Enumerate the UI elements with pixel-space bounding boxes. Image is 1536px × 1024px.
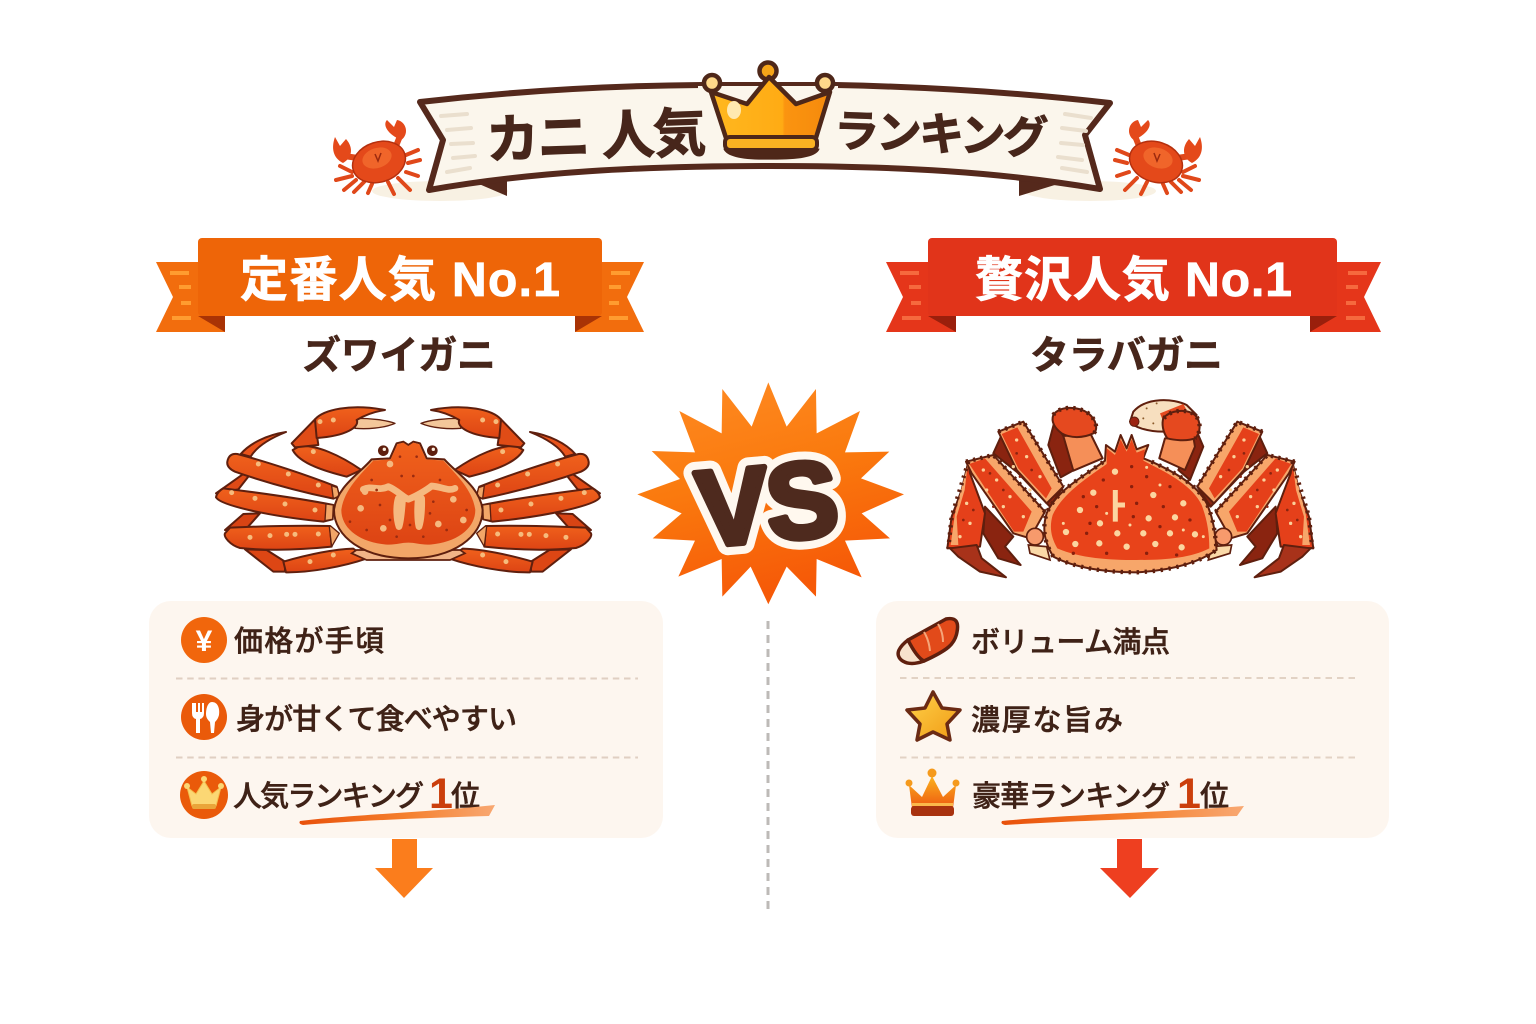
text: umami: 濃厚な旨み: [971, 704, 1123, 737]
panel dividers: [900, 678, 1360, 758]
icon: crown: [698, 62, 838, 159]
ribbon folds: [198, 316, 602, 332]
ribbon main band: [928, 238, 1337, 316]
icon: crab leg: [898, 619, 958, 663]
text: ranking: 豪華ランキング: [972, 780, 1170, 813]
banner ribbon: [420, 85, 1110, 190]
icon: crown: [906, 768, 960, 816]
text: rank number: 1: [429, 770, 453, 818]
illustration: king crab: [947, 400, 1313, 577]
arrow: right: [1100, 839, 1159, 898]
snow crab left legs: [216, 407, 395, 572]
panel dividers: [176, 678, 638, 758]
illustration: snow crab: [216, 407, 600, 572]
centre dashed divider: [766, 621, 770, 912]
ribbon main band: [198, 238, 602, 316]
heading: タラバガニ: タラバガニ: [1030, 335, 1223, 378]
icon: yen: ¥: [196, 625, 213, 658]
ribbon text: 贅沢人気 No.1: [975, 254, 1292, 307]
king crab spots: [1066, 472, 1195, 547]
snow crab right legs: [421, 407, 600, 572]
snow crab carapace centre: [341, 443, 475, 545]
text: volume: ボリューム満点: [971, 626, 1170, 659]
text: ranking: 人気ランキング: [233, 780, 424, 813]
snow crab spots: [361, 464, 463, 528]
banner end streaks: [441, 114, 1091, 172]
king crab right legs: [1197, 422, 1313, 577]
ribbon stitching: [900, 273, 1367, 318]
banner ribbon tails: [430, 178, 1105, 196]
underline stroke: [299, 805, 495, 825]
king crab joints: [1027, 528, 1232, 560]
ribbon tails: [886, 262, 1381, 332]
icon: star: [907, 692, 960, 740]
king crab left legs: [947, 422, 1063, 577]
panel: ズワイガニ features: [149, 601, 663, 838]
king crab right claw arm: [1130, 400, 1203, 480]
text: rank number: 1: [1177, 770, 1201, 818]
king crab carapace: [1044, 435, 1217, 572]
panel: タラバガニ features: [876, 601, 1389, 838]
title text: right: ランキング: [833, 105, 1049, 164]
left ribbon: 定番人気 No.1: [156, 238, 644, 332]
heading: ズワイガニ: ズワイガニ: [302, 335, 496, 378]
king crab carapace centre: [1051, 439, 1209, 560]
ribbon folds: [928, 316, 1337, 332]
ribbon tails: [156, 262, 644, 332]
snow crab underside: [352, 550, 465, 560]
icon: small crab right: [1115, 120, 1202, 194]
text: rank suffix: 位: [1200, 780, 1229, 813]
snow crab markings: [363, 486, 455, 527]
right ribbon: 贅沢人気 No.1: [886, 238, 1381, 332]
panel background: [876, 601, 1389, 838]
king crab left claw arm: [1048, 408, 1103, 477]
snow crab carapace: [334, 442, 483, 558]
icon: small crab left: [333, 120, 420, 194]
VS text: VS: [692, 438, 841, 570]
VS white outline: VS: [692, 438, 841, 570]
arrow: left: [375, 839, 433, 898]
text: taste: 身が甘くて食べやすい: [236, 703, 517, 736]
burst star: [637, 382, 904, 604]
text: rank suffix: 位: [451, 780, 480, 813]
panel background: [149, 601, 663, 838]
ribbon stitching: [170, 273, 630, 318]
ribbon text: 定番人気 No.1: [240, 254, 560, 307]
text: price: 価格が手頃: [234, 625, 384, 658]
title text: left: カニ 人気: [485, 104, 707, 171]
title banner: [333, 62, 1202, 201]
icon: crown badge: [180, 771, 228, 819]
underline stroke: [1001, 806, 1244, 825]
VS burst: [637, 382, 904, 604]
banner ground shadows: [372, 181, 1156, 201]
snow crab eyes: [378, 445, 438, 456]
king crab carapace teeth: [1044, 461, 1217, 572]
icon: yen: [181, 617, 227, 663]
icon: fork and spoon: [181, 694, 227, 740]
